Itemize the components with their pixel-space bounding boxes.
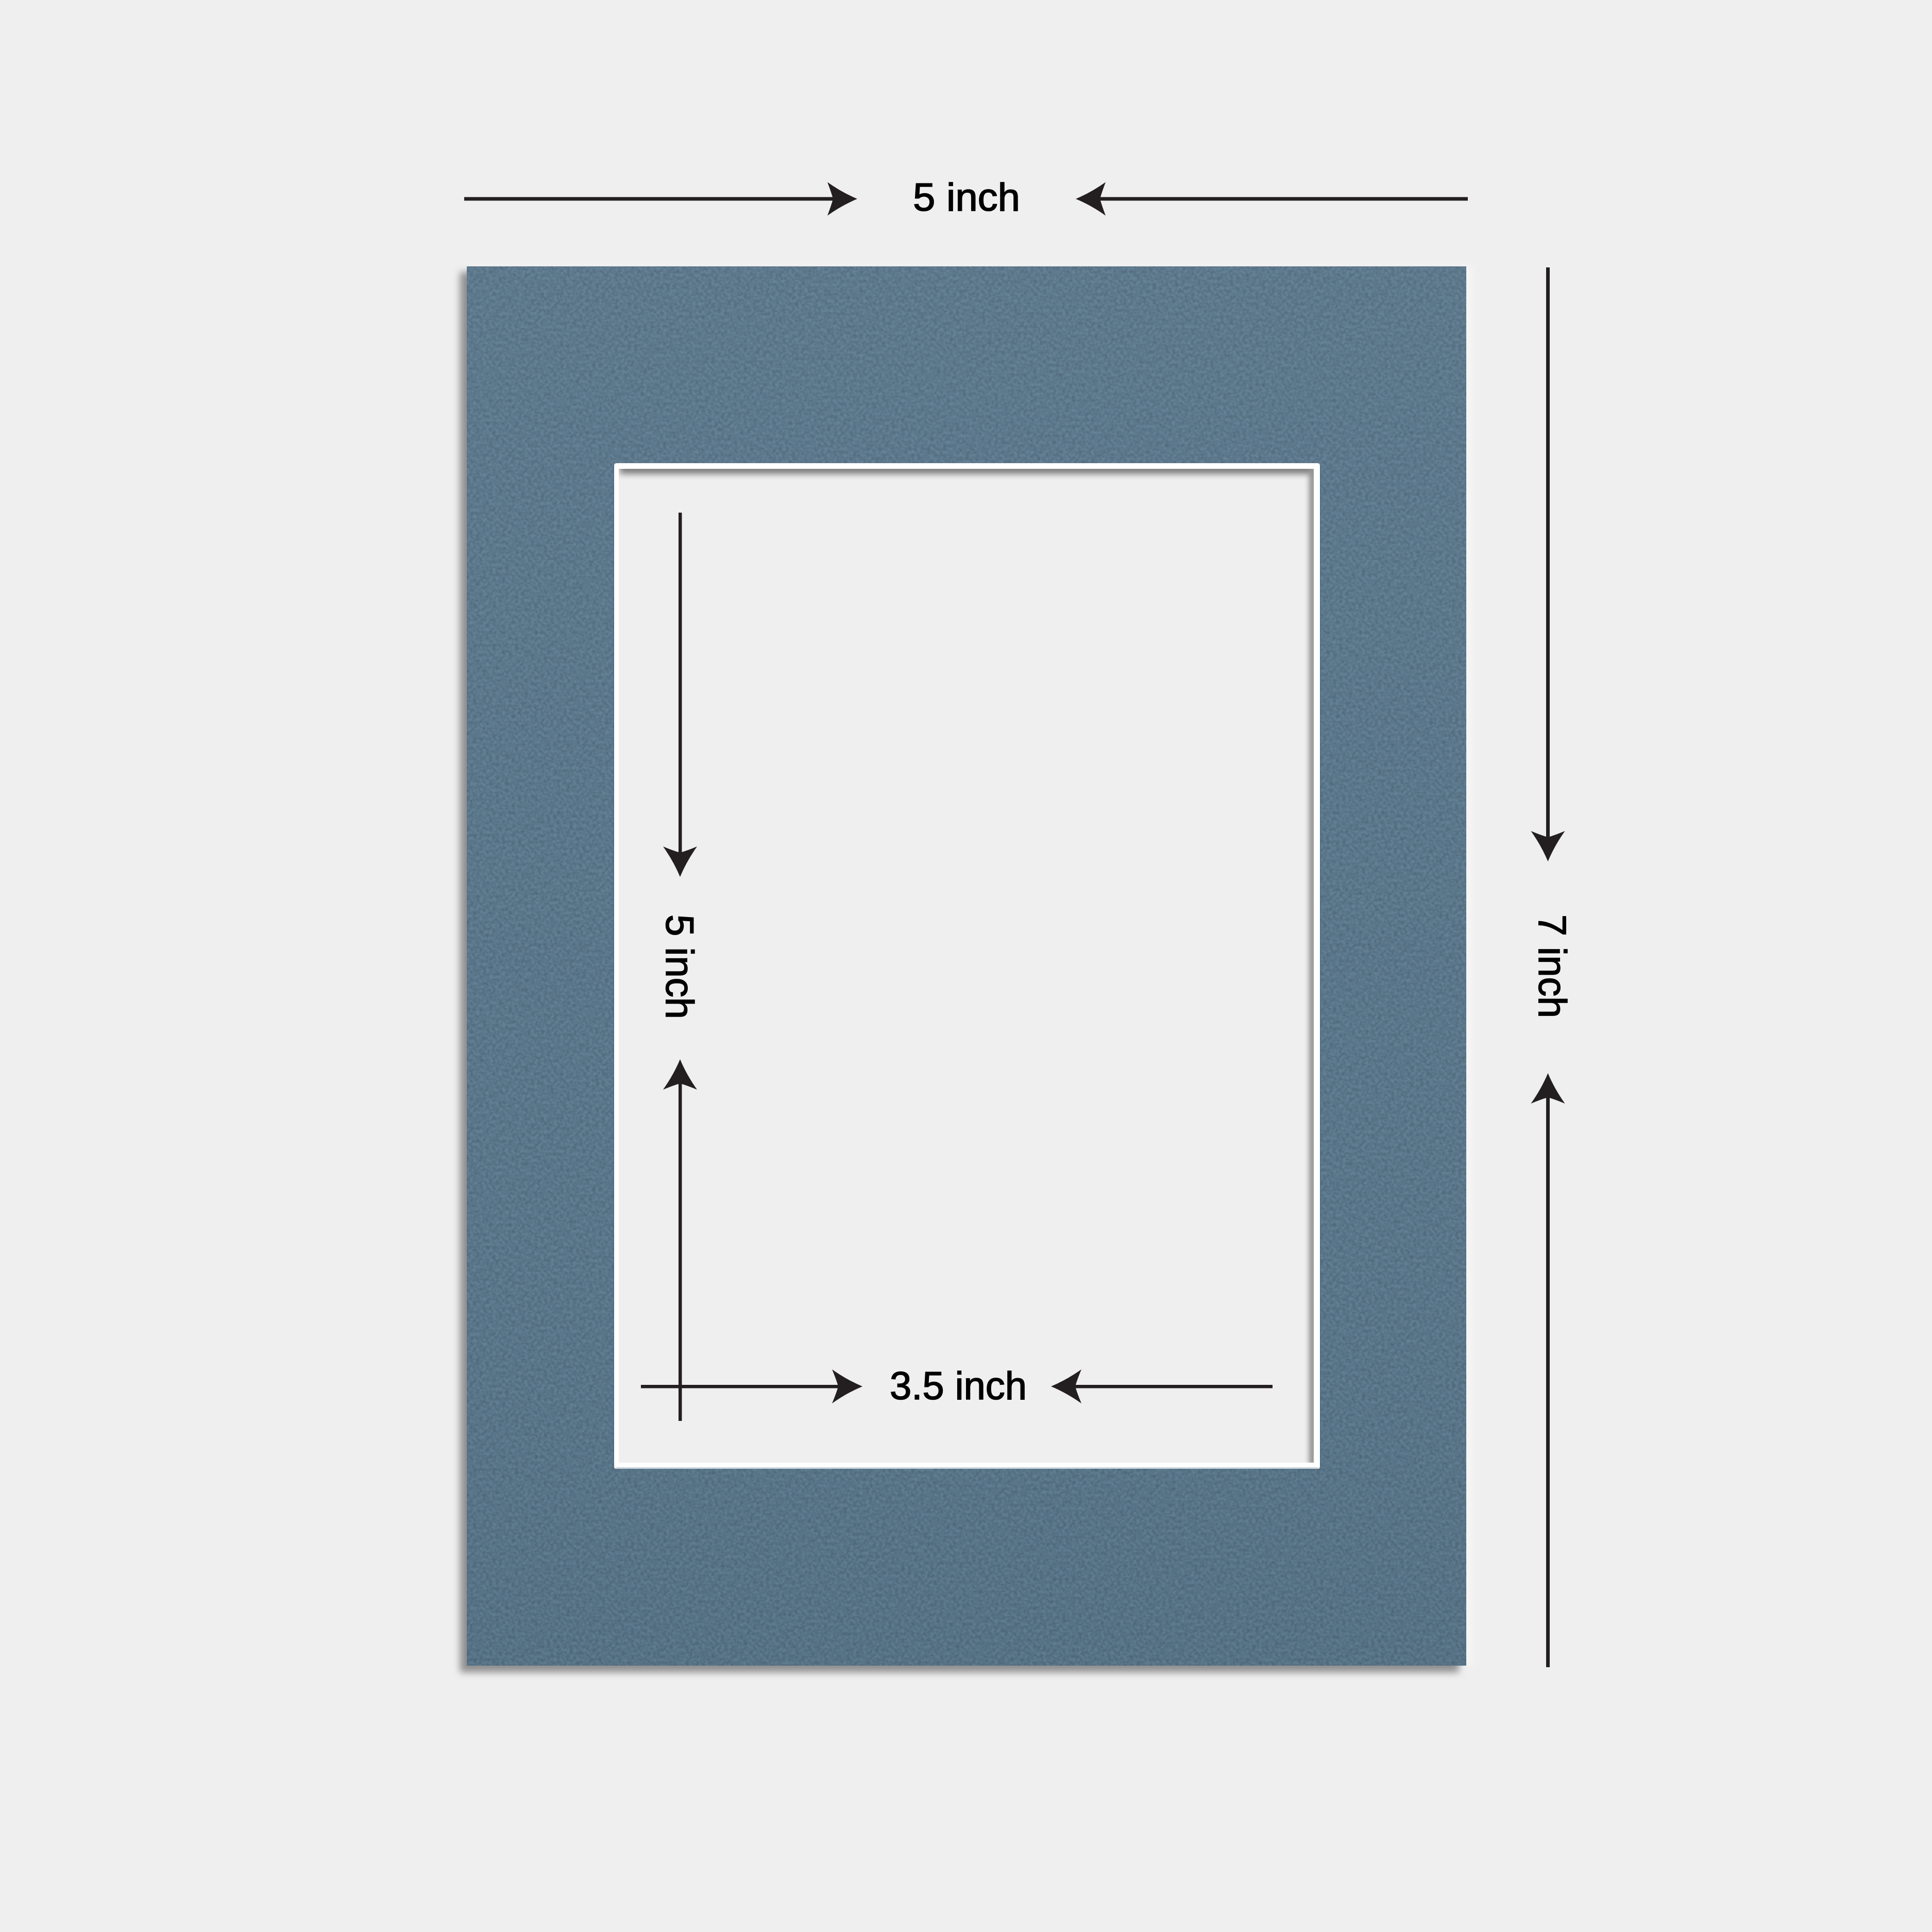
label: 5 inch: 5 inch [657,914,701,1019]
arrow: pointing up [1531,1073,1565,1667]
mat drop shadow [460,266,1472,1672]
mat board surface [467,266,1466,1666]
label: 7 inch: 7 inch [1530,914,1574,1018]
infographic: mat board dimensions [455,182,1568,1677]
arrow: pointing right [641,1369,862,1403]
dimension: outer height 7 inch [1530,267,1574,1667]
window inner shadows [620,463,1316,1466]
panel: mat board with window cut-out [460,266,1472,1672]
dimension: outer width 5 inch [464,176,1468,219]
dimension: window height 5 inch [657,513,701,1421]
label: 5 inch: 5 inch [913,176,1020,219]
arrow: pointing left [1051,1369,1273,1403]
label: 3.5 inch: 3.5 inch [890,1364,1027,1408]
window opening [613,463,1321,1469]
arrow: pointing down [663,513,697,877]
arrow: pointing right [464,182,857,215]
arrow: pointing up [663,1059,697,1421]
dimension: window width 3.5 inch [641,1364,1273,1408]
arrow: pointing down [1531,267,1565,861]
arrow: pointing left [1076,182,1468,215]
